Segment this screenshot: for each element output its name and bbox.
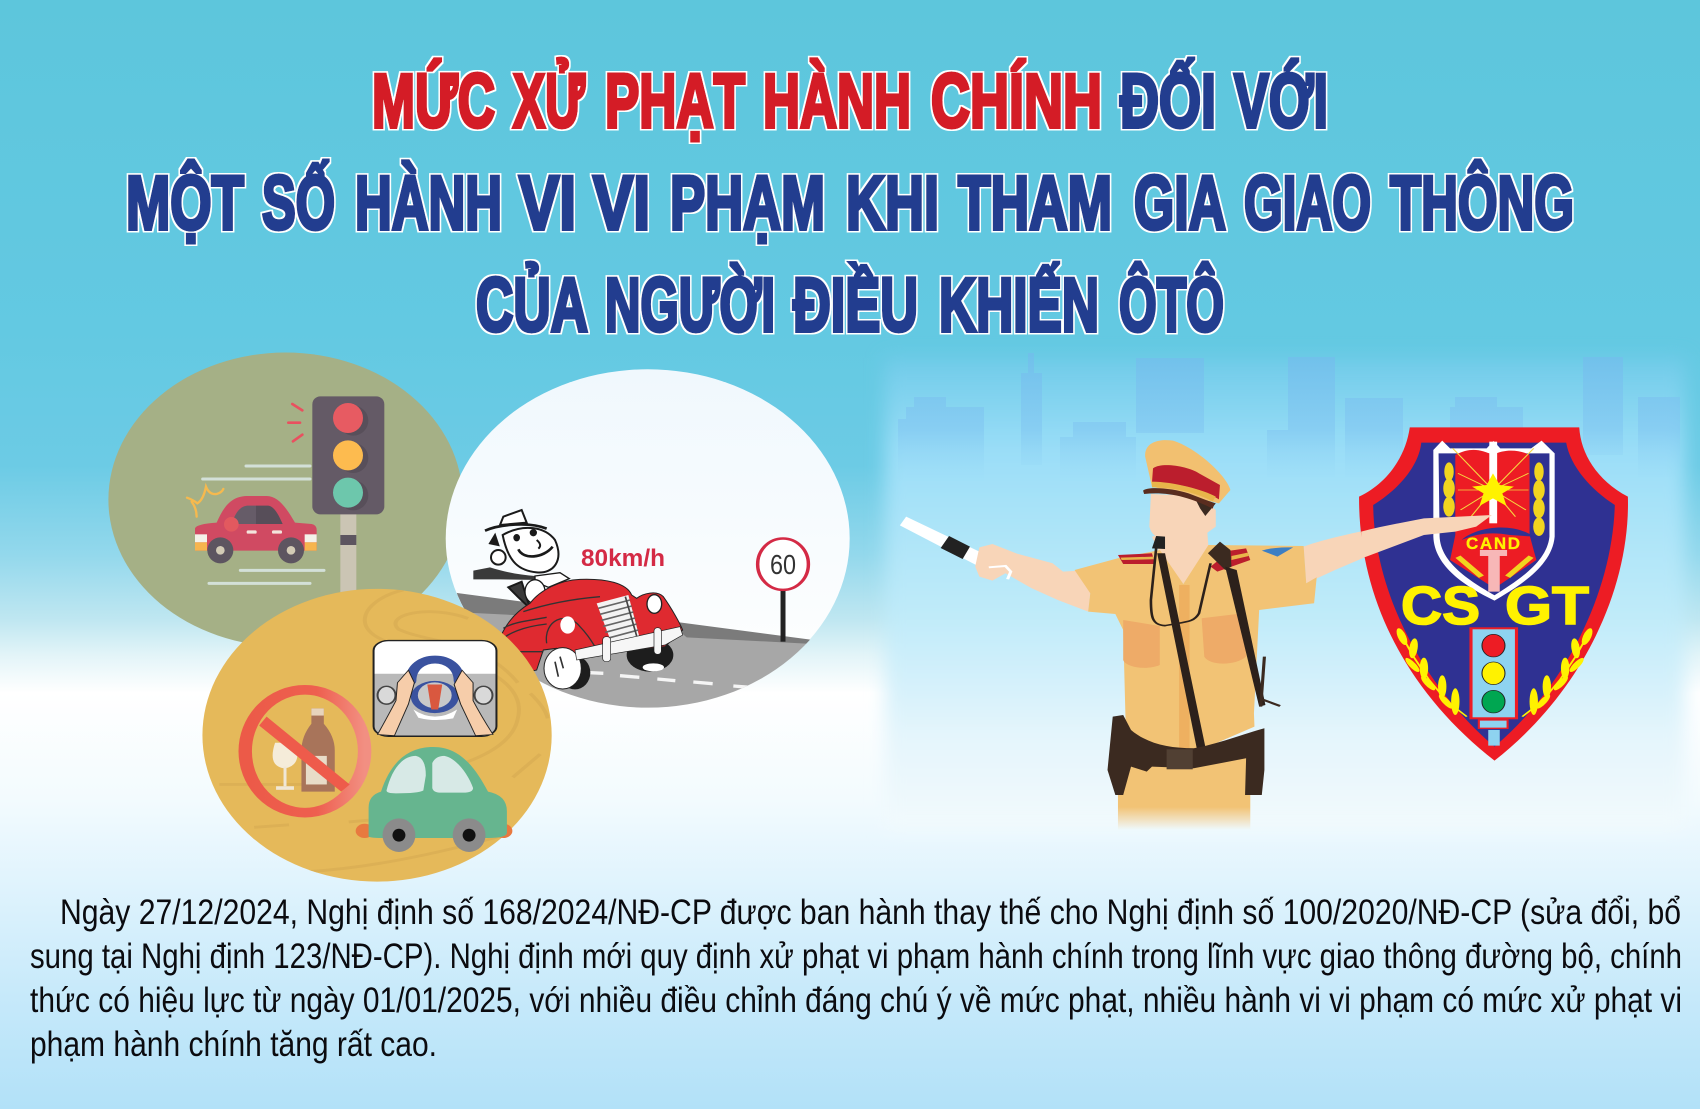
badge text: CS <box>1401 576 1480 636</box>
icon: steering wheel <box>374 641 496 736</box>
title line 1 red: XỬ <box>513 59 586 144</box>
cap and hair <box>1143 440 1230 516</box>
icon: no alcohol sign <box>245 690 365 813</box>
title line 2: THÔNG <box>1390 161 1574 246</box>
neck and face <box>1149 494 1216 584</box>
title line 3: NGƯỜI <box>605 263 775 348</box>
whistle and straps <box>1151 536 1280 749</box>
title line 3: ÔTÔ <box>1119 263 1224 348</box>
panel: city skyline backdrop <box>885 353 1685 828</box>
title line 3: ĐIỀU <box>793 263 918 348</box>
illustration: violation circles <box>108 352 850 882</box>
label: 80 km/h: 80km/h <box>581 545 665 572</box>
legs <box>1118 753 1250 830</box>
icon: red vintage car <box>497 579 683 689</box>
badge text: CAND <box>1466 534 1520 553</box>
panel: running red light circle <box>108 352 463 647</box>
title line 2: VI <box>593 161 650 246</box>
icon: red car <box>187 487 317 563</box>
title line 1 red: HÀNH <box>763 59 911 144</box>
shirt <box>1075 545 1317 749</box>
title line 2: HÀNH <box>355 161 502 246</box>
title line 1 red: MỨC <box>372 59 495 144</box>
title line 1 red: CHÍNH <box>931 59 1102 144</box>
icon: green car <box>356 747 512 852</box>
label: speed limit 60: 60 <box>770 549 796 580</box>
title line 3: KHIẾN <box>939 263 1099 348</box>
title line 2: THAM <box>958 161 1112 246</box>
panel: drink driving circle <box>202 589 552 882</box>
title line 2: MỘT <box>126 161 244 246</box>
title line 1 blue: VỚI <box>1234 59 1328 144</box>
title <box>126 59 1574 348</box>
title line 1 blue <box>1120 59 1328 144</box>
illustration: traffic police officer <box>900 440 1492 830</box>
baton <box>900 517 998 572</box>
icon: CSGT shield badge <box>1359 427 1628 761</box>
badge text: GT <box>1505 576 1589 636</box>
duty belt <box>1108 715 1264 795</box>
icon: speed limit sign <box>758 538 808 642</box>
right arm <box>1304 515 1492 583</box>
title line 2: GIA <box>1134 161 1226 246</box>
title line 2: PHẠM <box>670 161 825 246</box>
badge text <box>1401 534 1589 636</box>
text block: intro paragraph <box>30 893 1682 1064</box>
road <box>458 595 810 708</box>
title line 3: CỦA <box>476 263 588 348</box>
title line 2: VI <box>519 161 576 246</box>
title line 1 red: PHẠT <box>605 59 745 144</box>
left arm <box>975 544 1090 612</box>
title line 2: KHI <box>846 161 939 246</box>
officer hand over badge <box>1361 515 1492 558</box>
text block: intro paragraph: phạm hành chính tăng rất cao. <box>30 1025 437 1064</box>
title line 1 blue: ĐỐI <box>1120 59 1216 144</box>
title line 3 <box>476 263 1224 348</box>
panel: speeding circle <box>446 369 850 708</box>
title line 2: SỐ <box>262 161 335 246</box>
title line 1 red <box>372 59 1102 144</box>
icon: speed lines <box>203 466 324 583</box>
icon: cartoon driver <box>473 510 569 608</box>
title line 2 <box>126 161 1574 246</box>
icon: traffic light <box>288 396 384 593</box>
title line 2: GIAO <box>1244 161 1371 246</box>
